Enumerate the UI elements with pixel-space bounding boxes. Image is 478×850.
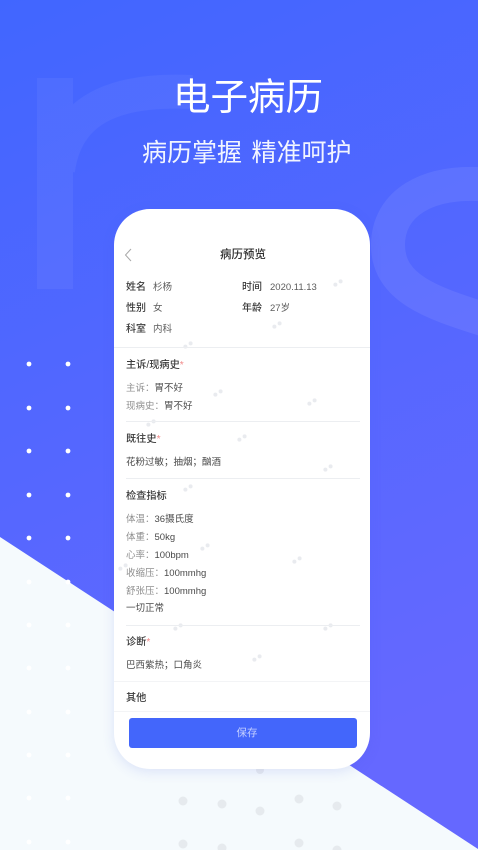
subtitle: 病历掌握 精准呵护 <box>142 139 351 167</box>
time value: 2020.11.13 <box>270 282 317 292</box>
indicators note: 一切正常 <box>126 602 164 614</box>
section heading: history: 既往史* <box>126 434 161 445</box>
history text: 花粉过敏；抽烟；酗酒 <box>126 456 221 468</box>
screen heading: 病历预览 <box>220 249 266 261</box>
diastolic pressure: 舒张压：100mmhg <box>126 586 206 596</box>
heart rate: 心率：100bpm <box>126 550 189 560</box>
section heading: diagnosis: 诊断* <box>126 637 150 648</box>
save button <box>129 718 357 748</box>
patient info: age: 年龄 <box>242 302 262 314</box>
present illness text: 现病史：胃不好 <box>126 400 193 412</box>
complaint text: 主诉：胃不好 <box>126 382 183 394</box>
gender value: 女 <box>153 302 163 314</box>
department value: 内科 <box>153 324 172 334</box>
panel: phone card <box>114 209 370 769</box>
diagnosis text: 巴西紫热；口角炎 <box>126 660 202 670</box>
systolic pressure: 收缩压：100mmhg <box>126 568 206 578</box>
patient info: name: 姓名 <box>126 282 146 292</box>
patient info: time: 时间 <box>242 282 262 292</box>
save button: 保存 <box>236 727 258 739</box>
title: 电子病历 <box>173 76 323 118</box>
age value: 27岁 <box>270 302 290 314</box>
section heading: complaint: 主诉/现病史* <box>126 360 184 371</box>
icon: back arrow <box>125 248 132 262</box>
patient info: department: 科室 <box>126 324 146 334</box>
patient info: gender: 性别 <box>126 302 146 314</box>
section heading: other: 其他 <box>126 693 146 704</box>
name value: 杉杨 <box>153 282 172 292</box>
temperature: 体温：36摄氏度 <box>126 514 194 524</box>
weight: 体重：50kg <box>126 532 175 542</box>
section heading: indicators: 检查指标 <box>126 491 167 502</box>
